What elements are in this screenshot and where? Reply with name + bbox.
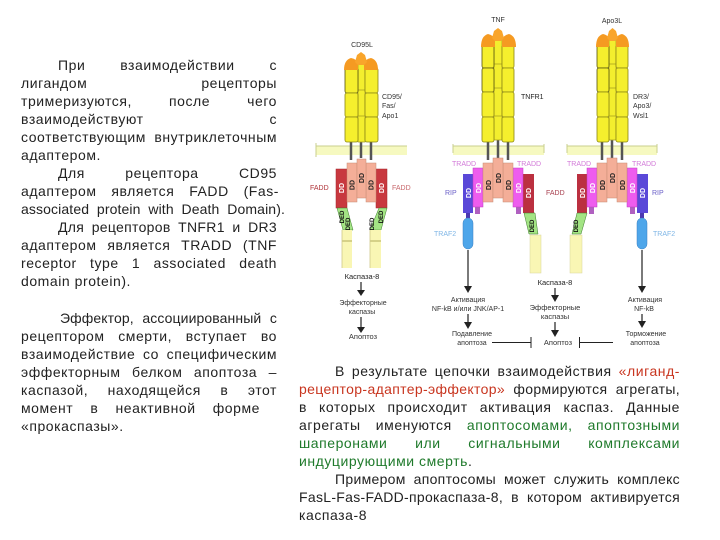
text block: receptor trimerization and adapters: receptor type 1 associated death bbox=[21, 255, 277, 271]
receptor label: DR3: Wsl1 bbox=[633, 113, 649, 120]
receptor: DR3: DD bbox=[640, 188, 647, 198]
text block: effector and procaspases: Эффектор, ассоциированный с bbox=[60, 310, 277, 326]
receptor: CD95: DED bbox=[346, 217, 352, 230]
label: FADD: FADD bbox=[546, 190, 565, 197]
text block: receptor trimerization and adapters: адаптером является FADD (Fas- bbox=[21, 183, 279, 199]
text block: receptor trimerization and adapters: соответствующим внутриклеточным bbox=[21, 129, 277, 145]
text block: apoptosome formation: шаперонами или сигнальными комплексами bbox=[299, 435, 680, 451]
receptor label: CD95 bbox=[382, 94, 402, 120]
receptor: CD95: DD bbox=[368, 180, 376, 190]
receptor: TNFR1: DD bbox=[516, 183, 523, 193]
pathway: caspase-8 to apoptosis: Эффекторные bbox=[339, 300, 387, 307]
label: RIP: RIP bbox=[652, 190, 664, 197]
label: FADD left: FADD bbox=[310, 185, 329, 192]
receptor: TNFR1 bbox=[432, 17, 580, 348]
pathway: NF-kB activation and inhibition of apoptosis: апоптоза bbox=[630, 340, 660, 347]
receptor: DR3: DD bbox=[620, 180, 627, 190]
ligand label: TNF: TNF bbox=[491, 17, 505, 24]
text block: receptor trimerization and adapters: Для рецептора CD95 bbox=[58, 165, 277, 181]
pathway: NF-kB activation: Активация bbox=[451, 297, 485, 304]
text block: receptor trimerization and adapters: тримеризуются, после чего bbox=[21, 93, 277, 109]
label: RIP: RIP bbox=[445, 190, 457, 197]
receptor: DR3: DED bbox=[574, 219, 580, 232]
pathway: NF-kB activation: апоптоза bbox=[457, 340, 487, 347]
text block: apoptosome formation bbox=[299, 363, 680, 523]
pathway: NF-kB activation and inhibition of apoptosis: Активация bbox=[628, 297, 662, 304]
text block: receptor trimerization and adapters: адаптером является TRADD (TNF bbox=[21, 237, 277, 253]
label: TRADD left: TRADD bbox=[567, 161, 591, 168]
receptor: DR3: DD bbox=[580, 188, 587, 198]
pathway: NF-kB activation and inhibition of apoptosis: NF-kB bbox=[634, 306, 654, 313]
text block: receptor trimerization and adapters: При взаимодействии с bbox=[58, 57, 277, 73]
text block: effector and procaspases: взаимодействие со специфическим bbox=[21, 346, 277, 362]
pathway: caspase-8 to apoptosis: Каспаза-8 bbox=[345, 272, 379, 281]
pathway: caspase-8 to effector caspases: Апоптоз bbox=[544, 338, 573, 347]
receptor: TNFR1: DD bbox=[526, 188, 533, 198]
text block: effector and procaspases: каспазой, находящейся в этот bbox=[21, 382, 277, 398]
text block: apoptosome formation: В результате цепочки взаимодействия «лиганд- bbox=[335, 363, 680, 379]
receptor: DR3: DD bbox=[610, 173, 617, 183]
receptor: TNFR1: DD bbox=[476, 183, 483, 193]
receptor label: DR3: Apo3/ bbox=[633, 103, 651, 110]
receptor: DR3 bbox=[567, 18, 675, 348]
receptor: DR3: DD bbox=[600, 180, 607, 190]
text block: apoptosome formation: рецептор-адаптер-эффектор» формируются агрегаты, bbox=[299, 381, 680, 397]
text block: effector and procaspases: «прокаспазы». bbox=[21, 418, 124, 434]
pathway: NF-kB activation: Подавление bbox=[452, 331, 492, 338]
pathway: caspase-8 to effector caspases: Каспаза-8 bbox=[538, 278, 572, 287]
label: TRAF2: TRAF2 bbox=[653, 231, 675, 238]
receptor: CD95: DD bbox=[339, 183, 346, 193]
text block: apoptosome formation: агрегаты именуются апоптосомами, апоптозными bbox=[299, 417, 680, 433]
text block: effector and procaspases: рецептором смерти, вступает во bbox=[21, 328, 277, 344]
receptor: CD95: DED bbox=[370, 217, 376, 230]
text block: apoptosome formation: Примером апоптосомы может служить комплекс bbox=[335, 471, 680, 487]
label: TRADD right: TRADD bbox=[517, 161, 541, 168]
label: TRADD right: TRADD bbox=[632, 161, 656, 168]
pathway: NF-kB activation: NF-kB и/или JNK/AP-1 bbox=[432, 306, 504, 313]
icon: TRAF2 capsule bbox=[463, 218, 473, 249]
label: FADD right: FADD bbox=[392, 185, 411, 192]
receptor: CD95: DED bbox=[340, 210, 346, 223]
receptor: TNFR1: DD bbox=[506, 180, 513, 190]
text block: receptor trimerization and adapters: адаптером. bbox=[21, 147, 101, 163]
pathway: NF-kB activation bbox=[432, 297, 531, 348]
text block: apoptosome formation: индуцирующими смерть. bbox=[299, 453, 472, 469]
text block: receptor trimerization and adapters: лигандом рецепторы bbox=[21, 75, 277, 91]
pathway: NF-kB activation and inhibition of apoptosis bbox=[580, 297, 666, 348]
text block: effector and procaspases: момент в неактивной форме bbox=[21, 400, 260, 416]
receptor label: DR3: DR3/ bbox=[633, 94, 649, 101]
pathway: NF-kB activation and inhibition of apoptosis: Торможение bbox=[626, 331, 666, 338]
receptor: DR3: DD bbox=[590, 183, 597, 193]
receptor: CD95: DD bbox=[379, 183, 386, 193]
receptor: TNFR1: DD bbox=[496, 173, 503, 183]
text block: receptor trimerization and adapters: Для рецепторов TNFR1 и DR3 bbox=[58, 219, 277, 235]
text block: receptor trimerization and adapters: associated protein with Death Domain). bbox=[21, 201, 285, 217]
receptor label: CD95: CD95/ bbox=[382, 94, 402, 101]
receptor: TNFR1: DED bbox=[530, 219, 536, 232]
label: TRAF2: TRAF2 bbox=[434, 231, 456, 238]
receptor label: TNFR1: TNFR1 bbox=[521, 94, 544, 101]
arrow: TRAF2 to activation bbox=[464, 250, 472, 293]
icon: TRAF2 capsule bbox=[637, 218, 647, 249]
text block: apoptosome formation: в которых происходит активация каспаз. Данные bbox=[299, 399, 680, 415]
receptor label: DR3 bbox=[633, 94, 651, 120]
text block: effector and procaspases bbox=[21, 310, 277, 434]
text block: receptor trimerization and adapters: domain protein). bbox=[21, 273, 131, 289]
receptor: TNFR1: DD bbox=[466, 188, 473, 198]
receptor: CD95: DD bbox=[359, 173, 366, 183]
pathway: caspase-8 to effector caspases: Эффекторные bbox=[530, 303, 580, 312]
ligand label: Apo3L: Apo3L bbox=[602, 18, 622, 25]
ligand label: CD95L: CD95L bbox=[351, 42, 373, 49]
text block: receptor trimerization and adapters: взаимодействуют с bbox=[21, 111, 277, 127]
receptor: CD95 bbox=[310, 42, 411, 341]
receptor label: CD95: Fas/ bbox=[382, 103, 396, 110]
pathway: caspase-8 to effector caspases: каспазы bbox=[541, 312, 569, 321]
text block: effector and procaspases: эффекторным белком апоптоза – bbox=[21, 364, 277, 380]
receptor: CD95: DED bbox=[379, 210, 385, 223]
text block: apoptosome formation: каспаза-8 bbox=[299, 507, 367, 523]
receptor: CD95: DD bbox=[350, 180, 356, 190]
receptor: TNFR1: DD bbox=[486, 180, 493, 190]
receptor label: CD95: Apo1 bbox=[382, 113, 398, 120]
text block: apoptosome formation: FasL-Fas-FADD-прокаспаза-8, в котором активируется bbox=[299, 489, 680, 505]
pathway: caspase-8 to apoptosis bbox=[339, 272, 387, 341]
arrow: TRAF2 to NF-kB activation bbox=[638, 250, 646, 293]
text block: receptor trimerization and adapters bbox=[21, 57, 285, 289]
pathway: caspase-8 to effector caspases bbox=[530, 278, 580, 347]
label: TRADD left: TRADD bbox=[452, 161, 476, 168]
pathway: caspase-8 to apoptosis: Апоптоз bbox=[349, 332, 378, 341]
receptor: DR3: DD bbox=[630, 183, 637, 193]
pathway: caspase-8 to apoptosis: каспазы bbox=[349, 309, 375, 316]
